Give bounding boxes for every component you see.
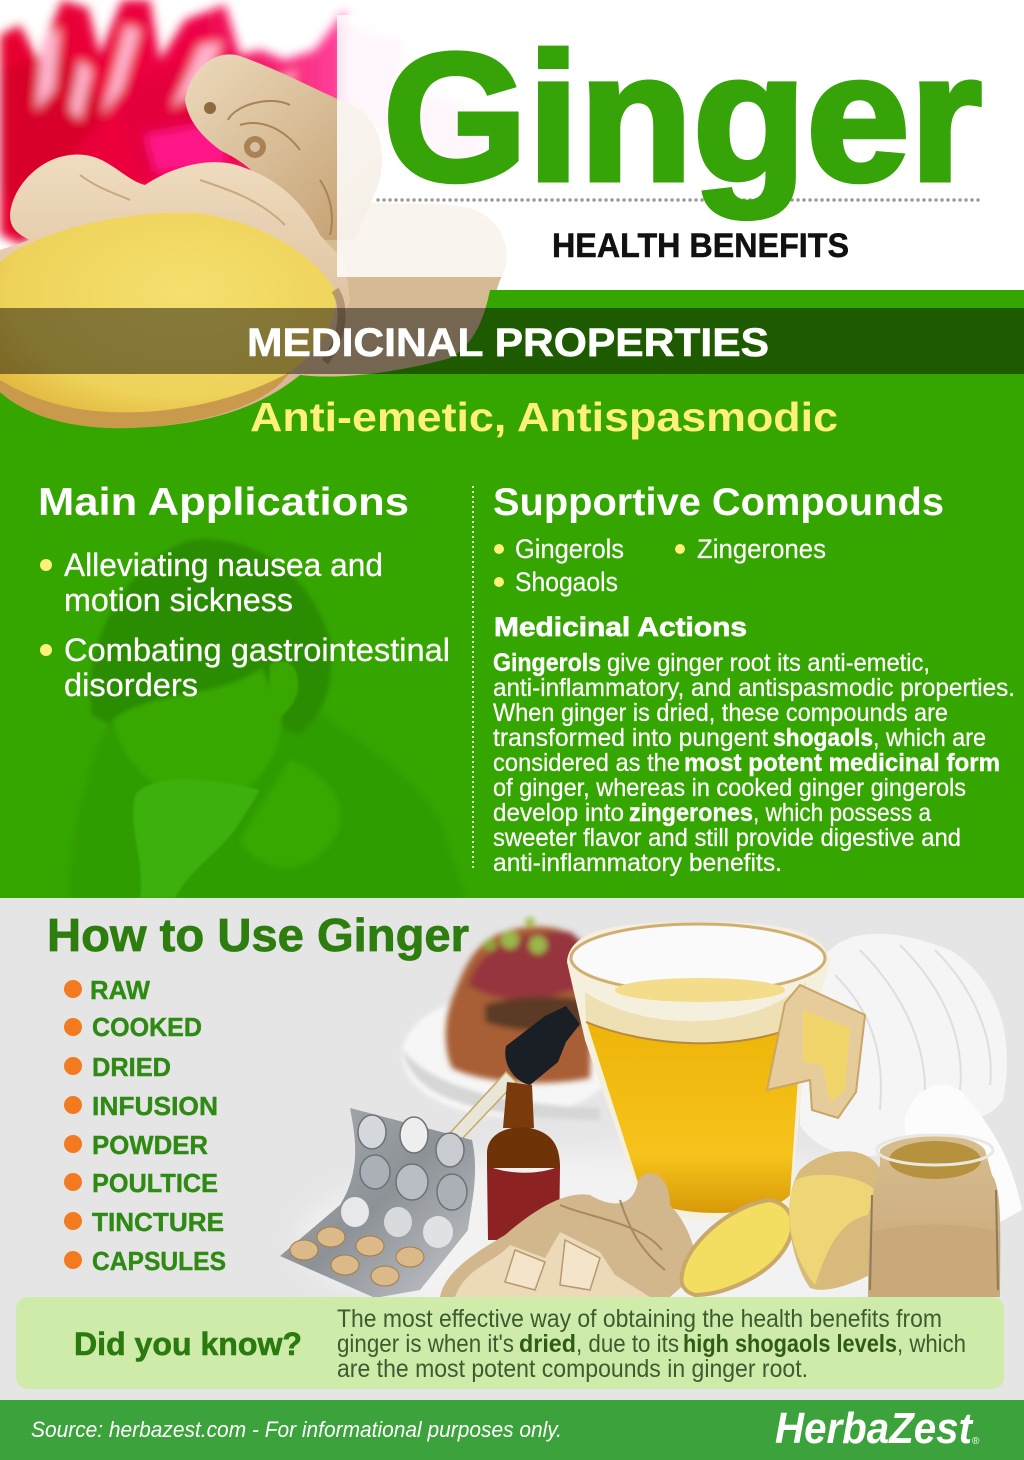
callout text: The most effective way of obtaining the health benefits from (337, 1305, 942, 1333)
dried ginger pile (440, 1173, 696, 1297)
callout text (337, 1305, 966, 1383)
callout text: ginger is when it's (337, 1330, 514, 1358)
compounds list: Zingerones (697, 534, 826, 564)
plate (402, 993, 618, 1120)
bullet: gastrointestinal (40, 632, 450, 703)
bullet: nausea: motion sickness (64, 582, 293, 618)
paragraph: medicinal actions: most potent medicinal form (684, 749, 1000, 777)
paragraph: medicinal actions: sweeter flavor and still provide digestive and (493, 824, 961, 852)
paragraph: medicinal actions: Gingerols (493, 649, 601, 677)
list: uses: COOKED (92, 1012, 202, 1042)
dotted rule (378, 198, 980, 202)
callout heading: Did you know? (74, 1326, 302, 1362)
callout text: are the most potent compounds in ginger root. (337, 1355, 808, 1383)
ginger lower right lobe (280, 195, 507, 376)
source note: Source: herbazest.com - For informational purposes only. (31, 1417, 562, 1442)
paragraph: medicinal actions: anti-inflammatory benefits. (493, 849, 782, 877)
ginger cut piece (789, 1151, 880, 1290)
woman face (112, 668, 282, 805)
column divider (472, 486, 474, 870)
list: uses: INFUSION (92, 1091, 218, 1121)
subtitle: HEALTH BENEFITS (552, 227, 849, 265)
compounds list: Gingerols (515, 534, 624, 564)
ginger rim fibre (325, 290, 342, 362)
food on plate (446, 917, 592, 1083)
list: uses (64, 975, 226, 1276)
paragraph: medicinal actions: anti-inflammatory, and antispasmodic properties. (493, 674, 1015, 702)
heading: how to use ginger: How to Use Ginger (47, 909, 469, 961)
title: Ginger: Ginger (383, 15, 982, 219)
compounds list (494, 534, 826, 597)
glass handle (767, 985, 865, 1118)
column: supportive compounds (493, 481, 1015, 877)
list: uses: RAW (90, 975, 150, 1005)
paragraph: medicinal actions: develop into (493, 799, 624, 827)
photo: pink flowers (0, 0, 490, 245)
dropper bottle (450, 1006, 580, 1240)
bullet: nausea (40, 547, 383, 618)
ginger rim shadow (0, 372, 290, 428)
paragraph: medicinal actions: When ginger is dried, these compounds are (493, 699, 948, 727)
pipette (450, 1072, 516, 1141)
heading: medicinal actions: Medicinal Actions (494, 612, 747, 642)
ginger left knob and main body (0, 155, 350, 428)
paragraph: medicinal actions: , which possess a (753, 799, 931, 827)
photo: ginger root (0, 54, 507, 428)
woman hair (90, 539, 332, 735)
bottle shoulder (487, 1127, 560, 1168)
list: uses: TINCTURE (92, 1207, 224, 1237)
ginger slice (682, 1200, 792, 1295)
white translucent overlay (337, 15, 1024, 277)
heading: medicinal properties: MEDICINAL PROPERTIES (247, 321, 769, 365)
callout text: high shogaols levels (683, 1330, 897, 1358)
compounds list: Shogaols (515, 567, 618, 597)
bottle neck (503, 1082, 534, 1128)
callout text: dried (519, 1330, 576, 1358)
photo: woman silhouette (68, 539, 465, 898)
paragraph: medicinal actions (493, 649, 1015, 877)
paragraph: medicinal actions: shogaols (773, 724, 873, 752)
panel: how to use background (0, 898, 1024, 1400)
footer (0, 1400, 1024, 1460)
woman hand (133, 779, 260, 898)
subheading: properties: Anti-emetic, Antispasmodic (250, 394, 838, 440)
photo: ginger preparations (280, 917, 1022, 1330)
rubber bulb and cap (505, 1006, 580, 1085)
panel: medicinal properties background (0, 290, 1024, 898)
list: uses: DRIED (92, 1052, 171, 1082)
poultice (800, 934, 1022, 1222)
bullet: gastrointestinal: disorders (64, 667, 198, 703)
powder jar (868, 1135, 1000, 1297)
paragraph: medicinal actions: zingerones (629, 799, 753, 827)
ginger cut face (0, 213, 335, 412)
tea glass (567, 922, 865, 1220)
callout text: , due to its (576, 1330, 679, 1358)
panel: header background (0, 0, 1024, 290)
paragraph: medicinal actions: of ginger, whereas in cooked ginger gingerols (493, 774, 966, 802)
ginger upper knob (185, 54, 382, 240)
woman neck (240, 760, 340, 867)
bullet: gastrointestinal: Combating gastrointestinal (64, 632, 450, 668)
blister pack (280, 1108, 475, 1298)
list: uses: POULTICE (92, 1168, 218, 1198)
bullet: nausea: Alleviating nausea and (64, 547, 383, 583)
band: medicinal properties (0, 308, 1024, 374)
list: uses: CAPSULES (92, 1246, 226, 1276)
paragraph: medicinal actions: give ginger root its anti-emetic, (607, 649, 930, 677)
woman ear (268, 661, 298, 717)
paragraph: medicinal actions: transformed into pungent (493, 724, 768, 752)
logo registered mark: ® (972, 1436, 980, 1447)
column: main applications (38, 481, 450, 703)
callout text: , which (897, 1330, 966, 1358)
woman body (68, 700, 465, 898)
paragraph: medicinal actions: , which are (873, 724, 986, 752)
bottle body (487, 1166, 560, 1240)
paragraph: medicinal actions: considered as the (493, 749, 680, 777)
heading: supportive compounds: Supportive Compounds (493, 481, 944, 524)
callout: did you know (16, 1297, 1004, 1389)
list: uses: POWDER (92, 1130, 208, 1160)
logo: HerbaZest: HerbaZest (775, 1404, 974, 1453)
soft floor glow (300, 1150, 980, 1330)
heading: main applications: Main Applications (38, 481, 409, 524)
